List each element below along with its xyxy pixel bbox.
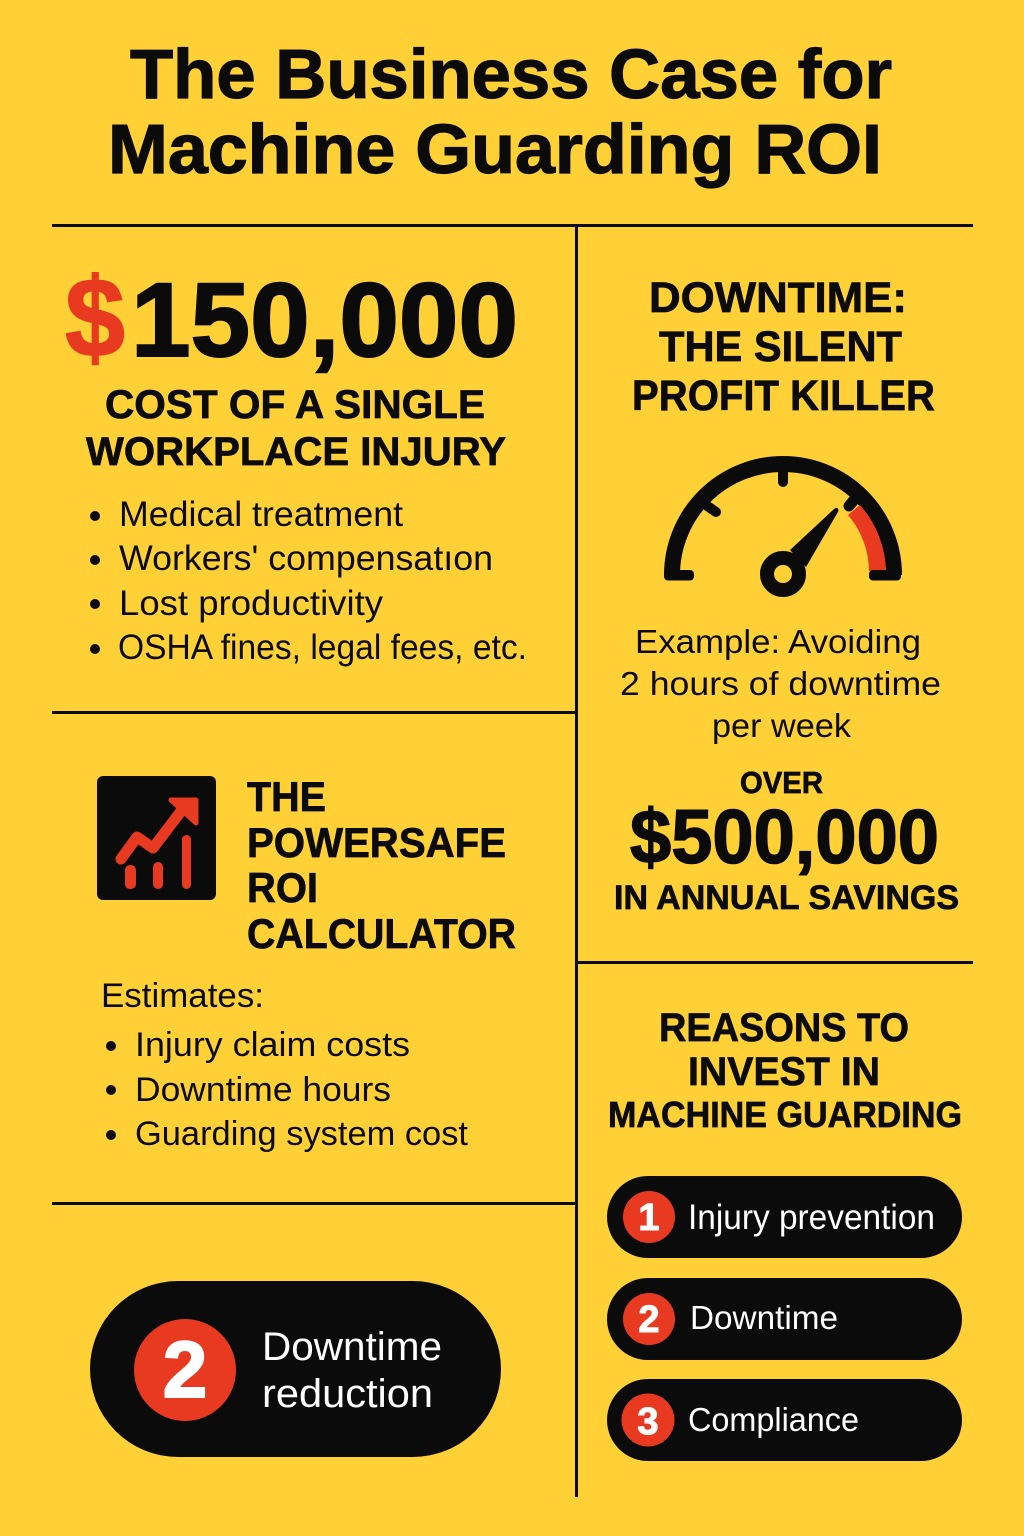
title: Machine Guarding ROI	[108, 110, 882, 188]
big number: $150,000: 150,000	[131, 262, 518, 379]
heading: the powersafe ROI calculator: THE	[247, 773, 326, 820]
callout: downtime reduction pill	[90, 1281, 501, 1457]
stat: over $500,000 in annual savings: IN ANNUAL SAVINGS	[614, 879, 959, 917]
bullet list: injury costs	[90, 495, 527, 667]
heading: reasons to invest in machine guarding: MACHINE GUARDING	[608, 1094, 962, 1135]
bullet list: injury costs: Medical treatment	[119, 495, 403, 534]
pill: compliance: Compliance	[688, 1401, 859, 1438]
heading: reasons to invest in machine guarding: REASONS TO	[659, 1006, 909, 1050]
heading: the powersafe ROI calculator: CALCULATOR	[247, 910, 516, 957]
stat: over $500,000 in annual savings: OVER	[740, 765, 823, 800]
text: downtime example: Example: Avoiding	[635, 623, 921, 660]
heading: downtime the silent profit killer: THE SILENT	[659, 323, 902, 371]
heading: the powersafe ROI calculator: ROI	[247, 864, 318, 911]
pill: compliance	[607, 1379, 962, 1461]
bullet list: estimates	[106, 1026, 469, 1153]
heading: cost of a single workplace injury: WORKPLACE INJURY	[86, 430, 506, 474]
pill: downtime	[607, 1278, 962, 1360]
panel: reasons to invest	[607, 1006, 962, 1461]
heading: the powersafe ROI calculator	[247, 773, 516, 957]
callout: downtime reduction pill: reduction	[262, 1372, 433, 1416]
text: downtime example: 2 hours of downtime	[620, 665, 941, 702]
bullet list: estimates: Guarding system cost	[135, 1115, 469, 1153]
pill: compliance: 3	[637, 1401, 659, 1443]
heading: reasons to invest in machine guarding: INVEST IN	[688, 1050, 880, 1094]
bullet list: estimates: Downtime hours	[135, 1071, 391, 1109]
heading: downtime the silent profit killer: PROFIT KILLER	[632, 372, 935, 420]
stat: over $500,000 in annual savings	[614, 765, 959, 917]
bullet list: injury costs: OSHA fines, legal fees, etc.	[118, 628, 527, 667]
heading: cost of a single workplace injury: COST OF A SINGLE	[105, 383, 485, 427]
pill: downtime: Downtime	[690, 1299, 838, 1336]
title	[108, 35, 892, 188]
icon: gauge	[664, 464, 901, 590]
heading: the powersafe ROI calculator: POWERSAFE	[247, 819, 506, 866]
stat: over $500,000 in annual savings: $500,000	[630, 795, 939, 880]
panel: ROI calculator	[97, 773, 516, 1153]
text: downtime example: per week	[712, 707, 852, 744]
panel: cost of injury	[65, 255, 527, 667]
big number: $150,000: $	[65, 255, 125, 380]
text: downtime example	[620, 623, 941, 744]
callout: downtime reduction pill: 2	[163, 1325, 207, 1414]
bullet list: injury costs: Lost productivity	[119, 584, 384, 623]
heading: cost of a single workplace injury	[86, 383, 506, 474]
pill: injury prevention	[607, 1176, 962, 1258]
pill: injury prevention: 1	[638, 1197, 660, 1239]
callout: downtime reduction pill: Downtime	[262, 1325, 442, 1369]
title: The Business Case for	[130, 35, 892, 113]
heading: downtime the silent profit killer	[632, 274, 935, 420]
panel: downtime	[614, 274, 959, 917]
bullet list: injury costs: Workers' compensatıon	[119, 539, 493, 578]
heading: reasons to invest in machine guarding	[608, 1006, 962, 1135]
pill: downtime: 2	[638, 1299, 660, 1341]
heading: downtime the silent profit killer: DOWNTIME:	[649, 274, 907, 322]
text: estimates: Estimates:	[101, 977, 264, 1015]
icon: rising chart	[97, 776, 216, 900]
bullet list: estimates: Injury claim costs	[135, 1026, 410, 1064]
pill: injury prevention: Injury prevention	[688, 1198, 935, 1237]
